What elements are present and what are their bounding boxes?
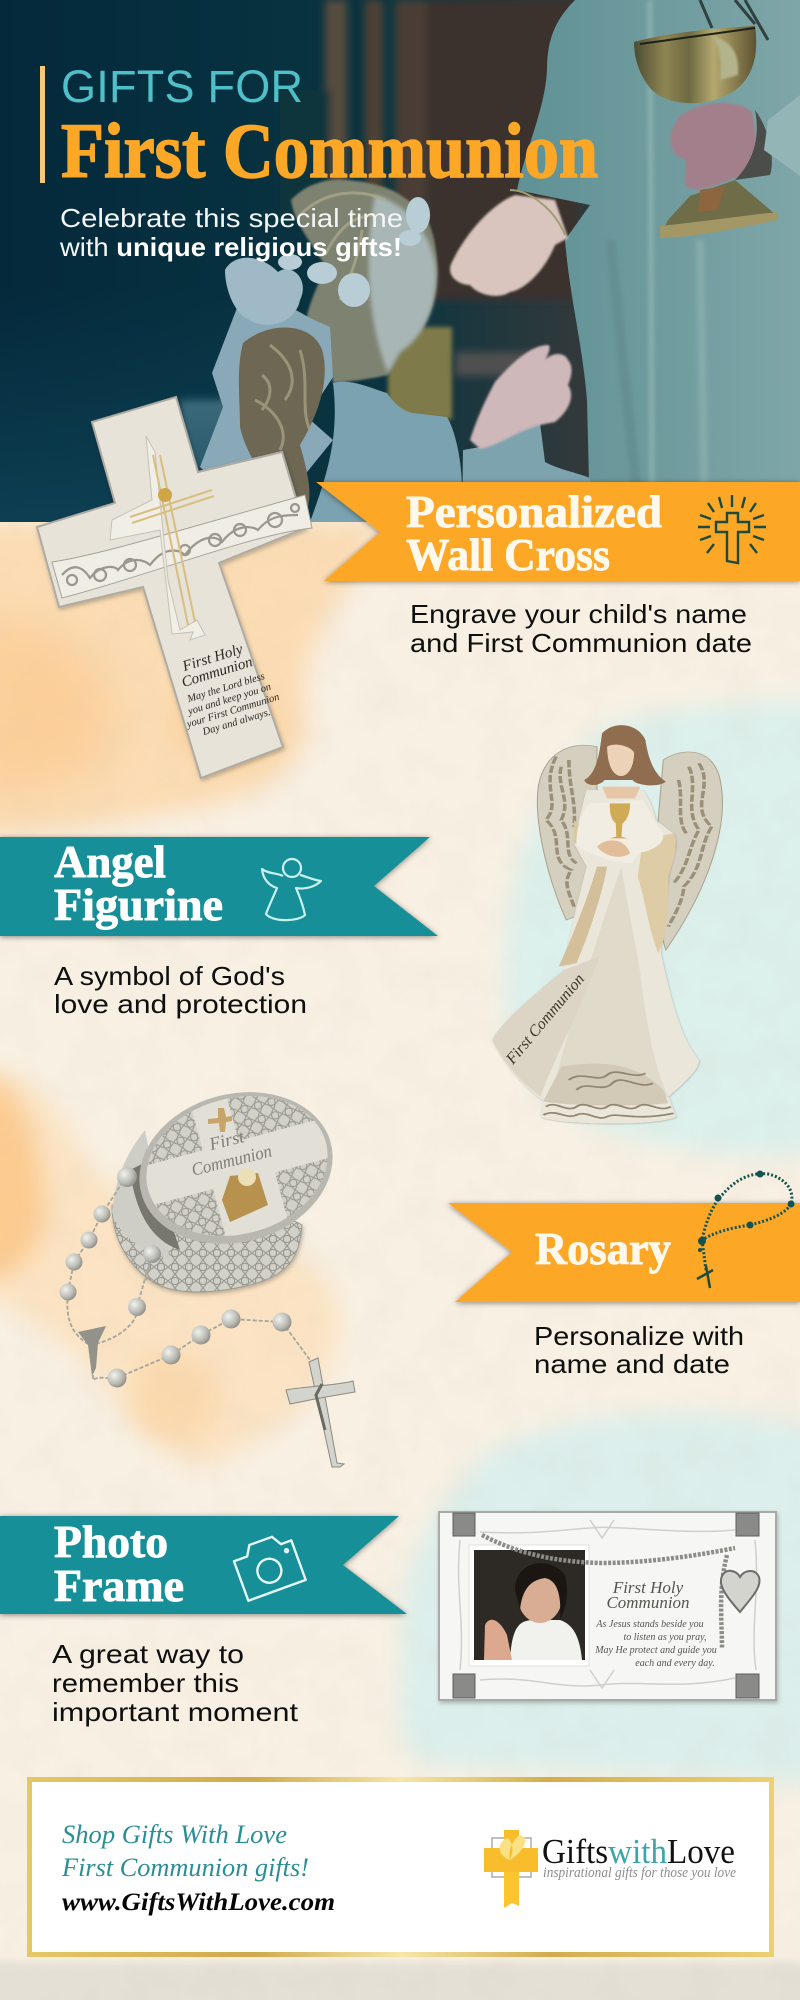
wings [537,745,602,920]
product: angel figurine [492,725,722,1124]
frame inscription: May He protect and guide you [594,1645,717,1656]
frame inscription: each and every day. [635,1658,715,1669]
text: personalized wall cross: Engrave your child's name [410,599,747,629]
frame inscription: Communion [606,1593,690,1612]
priest open hand [450,195,568,296]
photo mat [469,1545,589,1666]
girl dress [310,382,470,522]
gold shawl [559,867,607,967]
cta text: Shop Gifts With Love [62,1820,287,1849]
gown [492,790,699,1124]
banner title [406,486,662,580]
text: rosary: Personalize with [534,1321,744,1351]
veil [200,309,333,472]
chalice [610,803,630,838]
chain and heart [482,1535,735,1648]
banner: photo frame [0,1516,407,1614]
raised pale cross [110,436,205,640]
call to action panel [30,1780,772,1954]
banner title [54,1516,184,1611]
text: angel figurine: love and protection [54,989,307,1019]
hair strands [300,193,385,300]
cta text: First Communion gifts! [61,1853,309,1882]
icon: cross with rays [698,495,766,563]
text: rosary [534,1321,744,1379]
cta text [61,1820,335,1916]
neckline [602,787,640,798]
hair flowers and bow [225,197,430,325]
text: photo frame: remember this [52,1668,239,1698]
hero fade [0,370,223,522]
banner: personalized wall cross [316,482,800,581]
inner ornaments [459,1520,756,1688]
box lid [146,1096,328,1236]
text: photo frame [52,1639,299,1727]
hair back [584,725,666,785]
frame inscription: to listen as you pray, [623,1632,707,1643]
banner title: Figurine [54,879,223,930]
face [607,745,634,776]
text: photo frame: important moment [52,1697,299,1727]
gold cross on lid [208,1108,232,1132]
banner title: Photo [54,1516,168,1567]
icon: rosary [697,1170,794,1288]
cross inscription [167,635,284,742]
text: photo frame: A great way to [52,1639,244,1669]
text: angel figurine [54,961,307,1019]
logo: inspirational gifts for those you love [543,1865,736,1881]
lid panels [148,1096,328,1236]
chalice cup [634,26,778,238]
banner title: Frame [54,1560,184,1611]
photo [474,1550,585,1660]
frame inscription: As Jesus stands beside you [595,1619,704,1630]
cross inscription: May the Lord bless [185,671,266,705]
text: personalized wall cross: and First Communion date [410,628,752,658]
wood columns behind [180,0,577,470]
rosary centerpiece [78,1326,106,1376]
candle glow [388,327,452,419]
gold chalice on lid [222,1173,268,1222]
banner: angel figurine [0,836,438,936]
cross inscription: you and keep you on [186,682,273,718]
title block: with unique religious gifts! [59,232,402,262]
clips [453,1513,759,1698]
icon: angel [262,859,321,920]
girl head [291,180,437,383]
frame inscription [594,1578,717,1669]
lid inscription: Communion [189,1141,274,1180]
cross inscription: Communion [180,654,255,691]
banner: rosary [448,1170,800,1302]
rosary chain [67,1177,310,1380]
banner title: Wall Cross [406,529,610,580]
banner title: Personalized [406,486,662,537]
cross inscription: First Holy [180,641,245,675]
robe folds [610,0,705,522]
box lid rim [122,1071,350,1265]
girl curls [239,327,325,522]
crucifix [286,1358,355,1467]
logo: GiftswithLove [542,1832,735,1871]
chalice hand [671,103,756,189]
heading: first communion: First Communion [61,107,598,194]
banner title [54,836,223,930]
praying hands [470,345,572,449]
hero photo: girl receiving communion [0,0,800,522]
text: rosary: name and date [534,1349,730,1379]
sleeves and arms [577,800,663,863]
title block [40,61,598,262]
cross inscription: Day and always. [201,707,272,738]
banner title: Rosary [535,1223,671,1274]
heading: gifts for: GIFTS FOR [61,61,303,112]
pattern hem [543,1064,668,1106]
scroll band [52,495,312,598]
product: photo frame [439,1512,776,1700]
priest cuff [764,95,800,176]
priest robe [517,0,800,522]
angel sash inscription: First Communion [502,971,588,1068]
subtitle: Celebrate this special time [60,203,403,233]
box base [112,1205,302,1292]
gold cross [130,455,214,625]
head light side [369,195,436,373]
icon: camera [231,1531,306,1601]
text: personalized wall cross [410,599,752,658]
product: wall cross [37,397,312,778]
text: angel figurine: A symbol of God's [54,961,285,991]
rosary beads [60,1167,292,1388]
lid inscription: First [206,1126,247,1154]
banner title: Angel [54,836,166,887]
cta text: www.GiftsWithLove.com [62,1889,335,1916]
logo [484,1830,736,1908]
gown folds [543,867,668,1102]
product: rosary box [60,1066,356,1467]
accent bar [40,66,45,183]
chalice chain strands [700,0,768,40]
cross inscription: your First Communion [185,692,281,731]
frame inscription: First Holy [612,1578,684,1597]
